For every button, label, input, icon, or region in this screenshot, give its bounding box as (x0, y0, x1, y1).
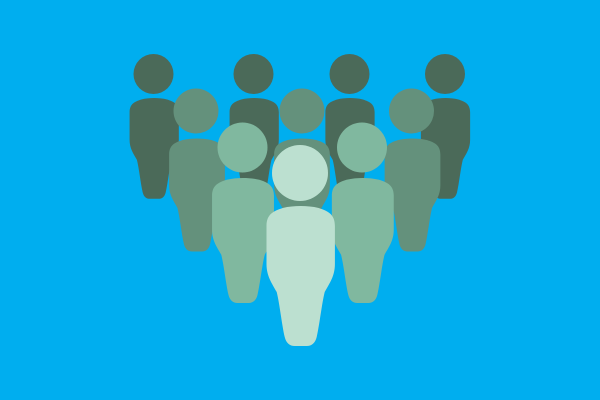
person: second row centre (274, 88, 330, 251)
person: back row 3 (325, 54, 375, 199)
third row of people (212, 122, 394, 303)
person: third row left (212, 122, 274, 303)
person: front centre (266, 145, 335, 346)
person: back row 4 (421, 54, 470, 199)
person: second row right (385, 88, 440, 251)
second row of people (169, 88, 440, 251)
person: back row 2 (230, 54, 279, 199)
person: third row right (332, 122, 394, 303)
person: second row left (169, 88, 225, 251)
person: back row 1 (130, 54, 179, 199)
back row of people (130, 54, 470, 199)
